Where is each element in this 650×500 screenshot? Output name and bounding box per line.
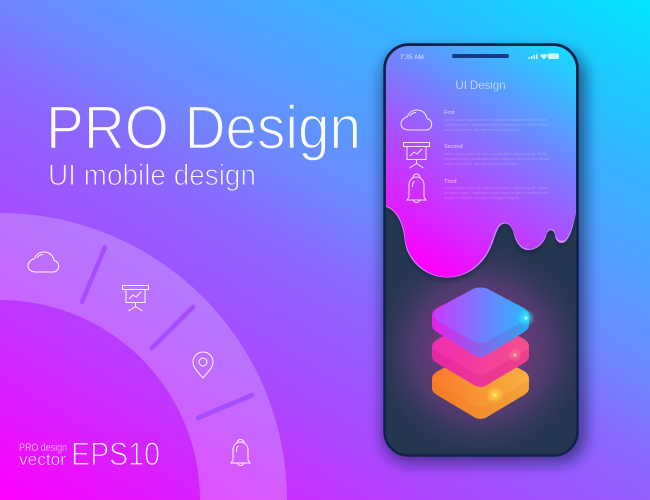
icon: bell bbox=[231, 440, 250, 466]
phone icon: cloud bbox=[401, 110, 432, 130]
icon: cloud bbox=[28, 252, 59, 272]
list item: Third bbox=[444, 179, 549, 200]
icon: presentation board bbox=[122, 286, 148, 311]
list item: Third: neque et lobortis. Aenean consequat fringilla. bbox=[444, 196, 520, 200]
sparkles bbox=[517, 309, 535, 327]
list item: First: First bbox=[444, 110, 455, 116]
speaker notch bbox=[452, 54, 509, 58]
status icons bbox=[528, 54, 559, 60]
list item: Third: Lorem ipsum dolor sit amet, consectetur adipiscing elit. Etiam bbox=[444, 186, 547, 190]
phone lower screen glow bbox=[386, 46, 576, 454]
badge: EPS10: PRO design bbox=[19, 442, 67, 454]
list item: Second: vel porta turpis. Vestibulum lorem dapibus sem at mollis dictas bbox=[444, 157, 549, 161]
layer stack bbox=[432, 288, 535, 419]
arc dividers bbox=[82, 247, 252, 418]
inner quarter circle bbox=[0, 300, 200, 500]
top blue layer bbox=[432, 288, 529, 357]
screen gradient with drips bbox=[386, 46, 576, 277]
title: PRO Design bbox=[46, 94, 361, 162]
list item: Second: neque et lobortis. Aenean consequat fringilla. bbox=[444, 162, 520, 166]
list item: Second bbox=[444, 144, 549, 166]
list item: Second: Second bbox=[444, 144, 463, 150]
list item: Third: vel porta turpis. Vestibulum lorem dapibus sem at mollis dictas bbox=[444, 191, 549, 195]
list item: First bbox=[444, 110, 549, 132]
badge: EPS10: vector bbox=[19, 450, 66, 469]
phone bbox=[384, 44, 578, 456]
drip shadow bbox=[388, 208, 576, 282]
status time: 7:35 AM bbox=[400, 54, 424, 61]
phone shadow bbox=[382, 50, 586, 464]
list item: Second: Lorem ipsum dolor sit amet, consectetur adipiscing elit. Etiam bbox=[444, 152, 547, 156]
badge: EPS10 bbox=[19, 436, 160, 472]
icon: map pin bbox=[193, 352, 213, 378]
phone body bbox=[384, 44, 578, 456]
badge: EPS10: EPS10 bbox=[71, 436, 160, 472]
list item: Third: Third bbox=[444, 179, 457, 185]
bottom orange layer bbox=[432, 351, 529, 419]
phone icon: bell bbox=[407, 174, 426, 202]
phone icon: presentation board bbox=[404, 142, 430, 168]
screen title: UI Design bbox=[456, 78, 506, 92]
outer arc band bbox=[0, 213, 287, 500]
subtitle: UI mobile design bbox=[48, 159, 256, 192]
drip highlight bbox=[386, 46, 576, 278]
list item: First: neque et lobortis. Aenean consequat fringilla. bbox=[444, 128, 520, 132]
list item: First: vel porta turpis. Vestibulum lorem dapibus sem at mollis dictas bbox=[444, 123, 549, 127]
middle pink layer bbox=[432, 319, 529, 387]
list item: First: Lorem ipsum dolor sit amet, consectetur adipiscing elit. Etiam bbox=[444, 118, 547, 122]
